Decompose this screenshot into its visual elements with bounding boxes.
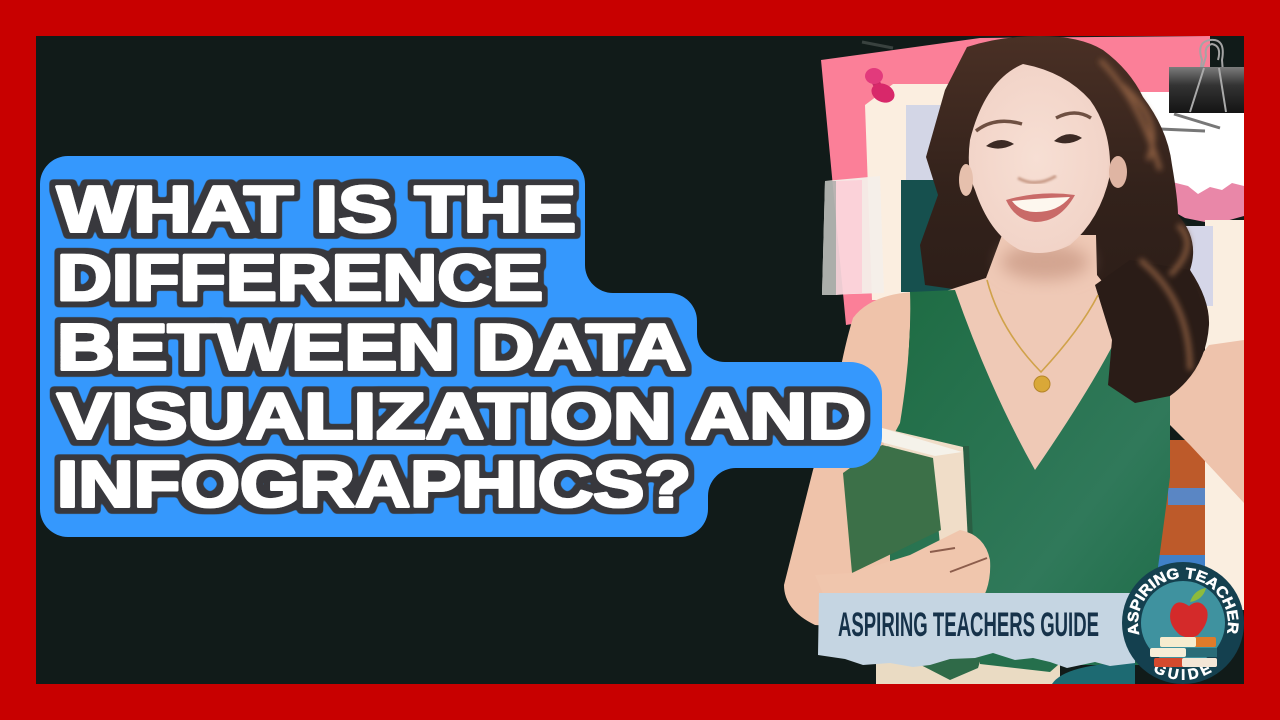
neck chest and shoulders xyxy=(948,235,1112,470)
faint scribble xyxy=(848,40,894,56)
right ear xyxy=(1109,156,1127,188)
hair back xyxy=(920,36,1209,340)
hair highlights xyxy=(1100,60,1190,370)
under chin shadow xyxy=(1001,244,1089,280)
title bubble xyxy=(40,156,882,537)
title text: BETWEEN DATA xyxy=(57,310,686,384)
left ear cheek xyxy=(959,164,973,196)
torn white paper xyxy=(1130,92,1244,194)
teal base xyxy=(1052,662,1135,684)
left eye xyxy=(986,140,1014,149)
title text xyxy=(57,172,866,520)
left shoulder and arm xyxy=(784,292,910,626)
trousers xyxy=(876,660,1060,684)
right eyebrow xyxy=(1056,113,1091,118)
lips xyxy=(1006,193,1075,222)
cream paper xyxy=(865,84,948,300)
books xyxy=(1150,637,1217,667)
shelf background xyxy=(1158,440,1205,568)
pendant xyxy=(1034,376,1050,392)
hair lower right over dress xyxy=(1095,260,1209,403)
right lavender card xyxy=(1186,226,1213,306)
right eye xyxy=(1054,134,1082,143)
nose xyxy=(1018,176,1056,183)
left eyebrow xyxy=(976,121,1022,131)
necklace xyxy=(987,280,1098,372)
torn banner xyxy=(818,593,1135,668)
face xyxy=(969,64,1110,253)
finger lines xyxy=(930,548,987,572)
right arm xyxy=(1165,340,1244,503)
title text: WHAT IS THE xyxy=(57,172,576,246)
tape xyxy=(822,176,884,295)
leaf xyxy=(1190,588,1206,602)
logo ring text bottom: GUIDE xyxy=(1154,666,1212,680)
binder clip xyxy=(1160,40,1244,131)
lavender card xyxy=(906,105,941,180)
forearm xyxy=(852,530,990,593)
pink brush strip xyxy=(1174,182,1244,222)
pink paper xyxy=(821,36,1210,325)
green dress xyxy=(880,290,1170,665)
title text: INFOGRAPHICS? xyxy=(57,448,691,520)
book xyxy=(843,428,973,573)
logo ring text top: ASPIRING TEACHER xyxy=(1128,567,1239,635)
apple xyxy=(1170,602,1208,638)
logo badge xyxy=(1122,562,1244,684)
book lower corner xyxy=(922,656,980,680)
teal card xyxy=(901,180,953,292)
title text: DIFFERENCE xyxy=(57,241,543,314)
dress below banner xyxy=(980,653,1058,672)
photo collage and presenter xyxy=(784,36,1244,684)
right cream paper xyxy=(1205,220,1244,610)
title text: VISUALIZATION AND xyxy=(57,380,866,452)
teeth xyxy=(1012,197,1070,212)
push pin xyxy=(865,68,894,103)
